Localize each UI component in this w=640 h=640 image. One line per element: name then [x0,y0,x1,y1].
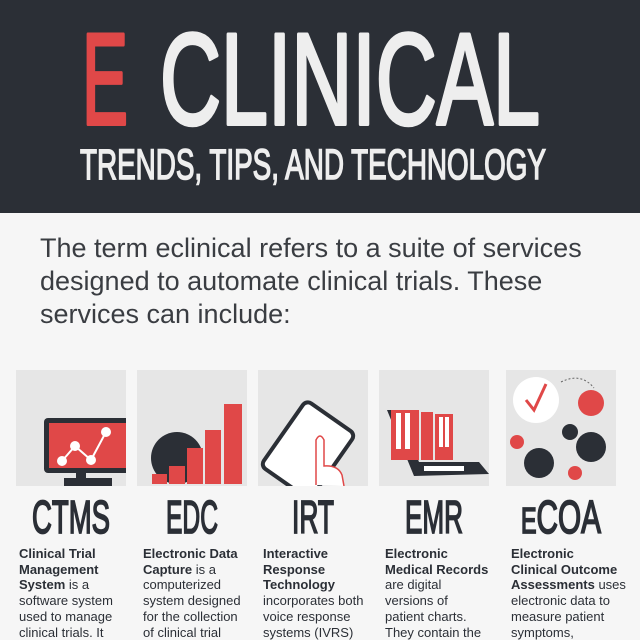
text: EDC: Electronic Data [143,546,238,561]
text: IRT: Response [263,562,325,577]
text: EMR: are digital [385,577,441,592]
text: EDC: Capture is a [143,562,216,577]
text: eCOA [511,546,626,640]
panel: EMR [379,370,489,486]
text: CTMS: Management [19,562,98,577]
text: eCOA: Electronic [511,546,574,561]
text: EDC: computerized [143,577,221,592]
title [82,6,540,152]
text: CTMS: System is a [19,577,89,592]
text: eCOA: Assessments uses [511,577,626,592]
text: CTMS [19,546,113,640]
panel: eCOA [506,370,616,486]
text: EMR: patient charts. [385,609,467,624]
text: EMR: They contain the [385,625,481,640]
header [0,0,640,213]
intro text: The term eclinical refers to a suite of services designed to automate clinical trials. These services can include: [40,233,582,329]
panel: EDC [137,370,247,486]
text: EMR: versions of [385,593,448,608]
text: IRT: incorporates both [263,593,363,608]
text: eCOA: symptoms, [511,625,574,640]
panel: CTMS [16,370,126,486]
text: CTMS: clinical trials. It [19,625,104,640]
text: CTMS: Clinical Trial [19,546,96,561]
text: EDC: of clinical trial [143,625,221,640]
text: eCOA: electronic data to [511,593,610,608]
text: EMR: Electronic [385,546,448,561]
panel: IRT [258,370,368,486]
text: EMR: Medical Records [385,562,488,577]
text: CTMS: software system [19,593,113,608]
text: CTMS: used to manage [19,609,112,624]
text: eCOA: Clinical Outcome [511,562,617,577]
text: EDC [143,546,241,640]
text: eCOA: measure patient [511,609,604,624]
text: EDC: for the collection [143,609,238,624]
title: E [82,6,128,152]
text: IRT: Technology [263,577,335,592]
text: EMR [385,546,488,640]
text: IRT: voice response [263,609,350,624]
text: IRT: Interactive [263,546,328,561]
text: IRT: systems (IVRS) [263,625,353,640]
text: IRT [263,546,363,640]
text: EDC: system designed [143,593,241,608]
